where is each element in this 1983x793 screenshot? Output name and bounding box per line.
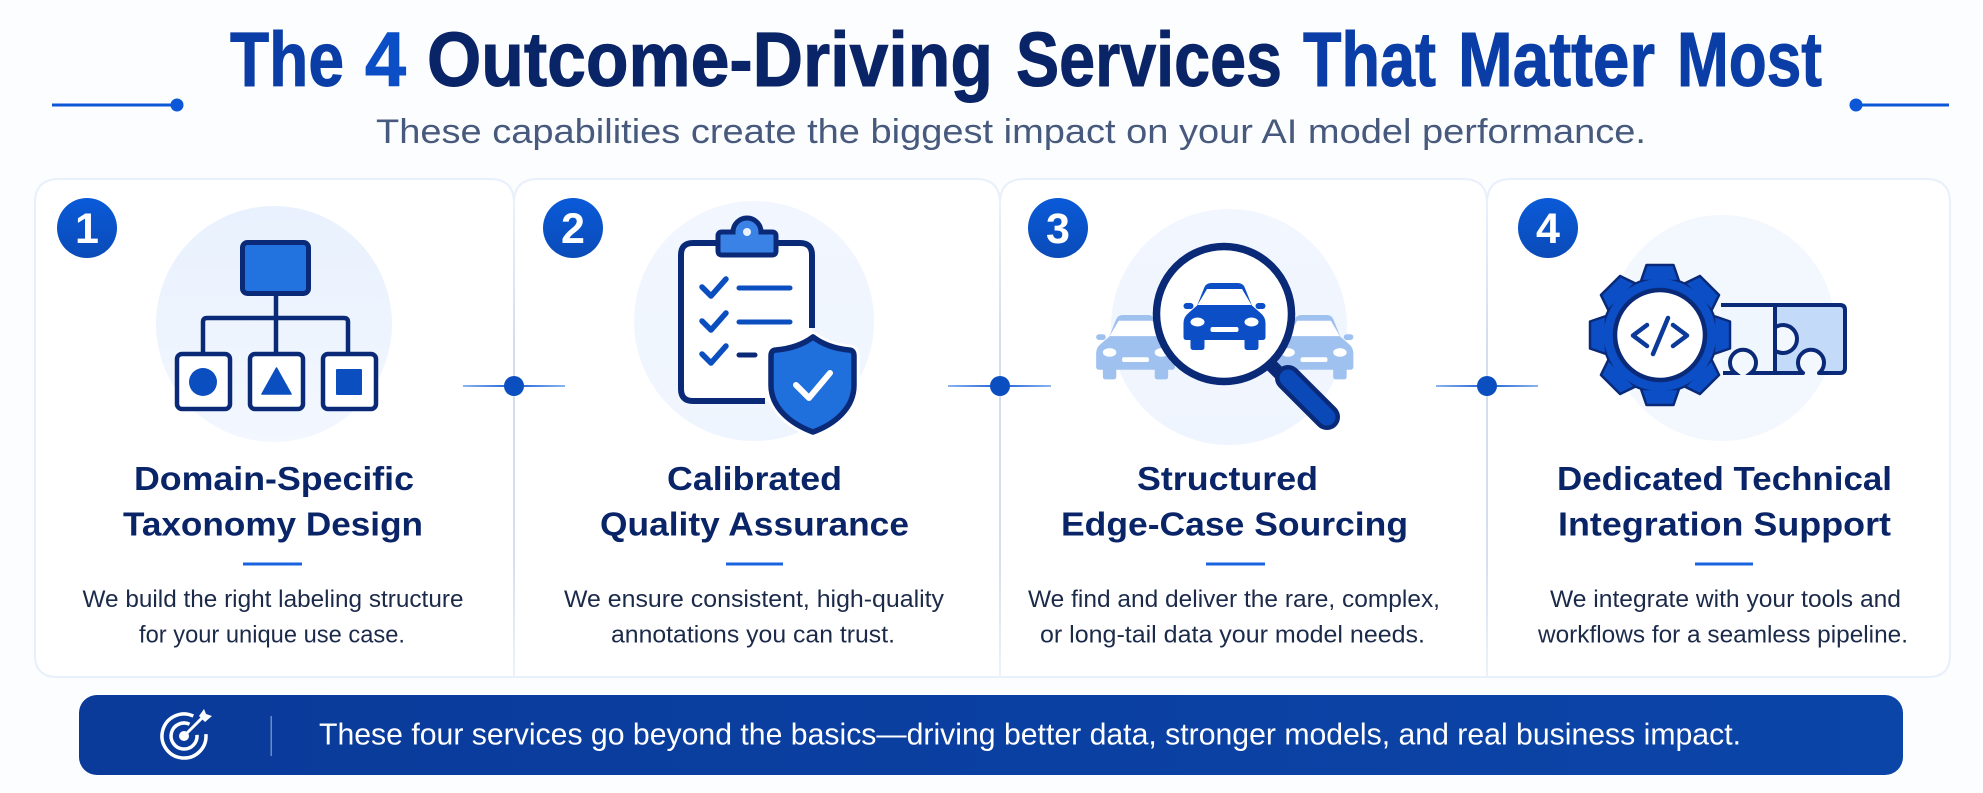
panel: card 1 taxonomy design <box>35 179 514 677</box>
badge 4 <box>1518 198 1578 258</box>
description 4: workflows for a seamless pipeline. <box>1537 622 1908 648</box>
heading 3: Edge-Case Sourcing <box>1061 506 1408 544</box>
heading 4 <box>1557 461 1892 544</box>
title: Outcome-Driving <box>427 17 993 103</box>
banner message: These four services go beyond the basics—driving better data, stronger models, and real business impact. <box>319 718 1741 752</box>
heading 3: Structured <box>1137 461 1318 498</box>
heading 1: Taxonomy Design <box>123 506 423 544</box>
panel: card 4 technical integration <box>1487 179 1950 677</box>
connector 3 to 4 <box>1436 376 1538 396</box>
icon: gear and puzzle <box>1590 215 1845 441</box>
connector 2 to 3 <box>948 376 1051 396</box>
panel: card 2 quality assurance <box>514 179 1000 677</box>
description 4: We integrate with your tools and <box>1550 586 1901 613</box>
heading 1: Domain-Specific <box>134 461 414 498</box>
heading 2: Calibrated <box>667 461 842 498</box>
icon: target with arrow <box>162 709 212 758</box>
badge 3: 3 <box>1046 205 1070 253</box>
heading 3 <box>1061 461 1408 544</box>
heading 2 <box>600 461 909 544</box>
description 2: annotations you can trust. <box>611 622 895 648</box>
description 3: We find and deliver the rare, complex, <box>1028 586 1440 613</box>
description 3: or long-tail data your model needs. <box>1040 622 1425 648</box>
description 3 <box>1028 586 1440 648</box>
badge 4: 4 <box>1536 205 1560 253</box>
panel: card 3 edge-case sourcing <box>1000 179 1487 677</box>
title: Matter <box>1458 17 1655 103</box>
description 1 <box>82 586 464 648</box>
badge 1: 1 <box>75 205 99 253</box>
subtitle: These capabilities create the biggest impact on your AI model performance. <box>376 113 1646 151</box>
left title ornament <box>52 98 184 112</box>
heading 1 <box>123 461 423 544</box>
badge 3 <box>1028 198 1088 258</box>
description 1: for your unique use case. <box>139 622 405 648</box>
icon: magnifier over cars <box>1096 209 1353 445</box>
description 2: We ensure consistent, high-quality <box>564 586 945 613</box>
title: The <box>230 17 344 103</box>
icon: taxonomy hierarchy <box>156 206 392 442</box>
banner <box>79 695 1903 775</box>
heading 2: Quality Assurance <box>600 506 909 544</box>
heading 4: Dedicated Technical <box>1557 461 1892 498</box>
title <box>230 17 1822 103</box>
right title ornament <box>1850 98 1949 112</box>
description 4 <box>1537 586 1908 648</box>
title: 4 <box>365 17 406 103</box>
title: Services <box>1016 17 1282 103</box>
badge 2 <box>543 198 603 258</box>
title: Most <box>1677 17 1822 103</box>
heading 4: Integration Support <box>1558 506 1891 544</box>
connector 1 to 2 <box>463 376 565 396</box>
description 2 <box>564 586 945 648</box>
badge 2: 2 <box>561 205 585 253</box>
description 1: We build the right labeling structure <box>82 586 464 613</box>
badge 1 <box>57 198 117 258</box>
icon: clipboard with shield <box>634 201 874 441</box>
title: That <box>1303 17 1436 103</box>
